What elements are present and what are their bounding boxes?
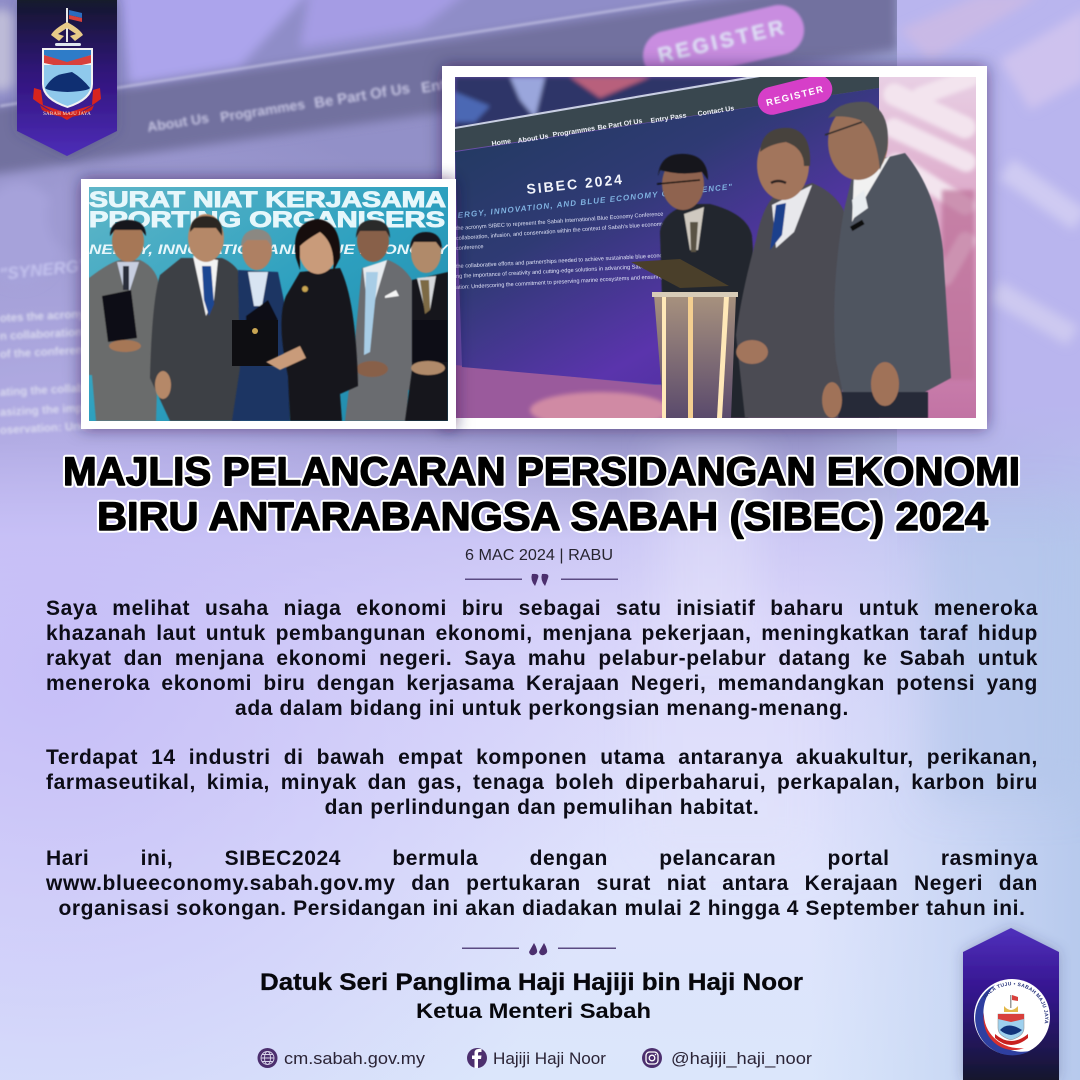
backdrop headings: PPORTING ORGANISERS (89, 207, 445, 232)
closing quote divider (462, 943, 616, 955)
background: blurred stage screen photo with lavender-blue wash: of the conference (0, 344, 96, 361)
title: BIRU ANTARABANGSA SABAH (SIBEC) 2024 (97, 495, 989, 539)
paragraph 1 (46, 597, 1038, 720)
screen (455, 88, 879, 390)
screen navigation labels: Entry Pass (650, 112, 687, 125)
woman in black (266, 219, 358, 421)
motto scroll (33, 88, 101, 120)
background: blurred stage screen photo with lavender-blue wash: "SYNERGY, (0, 255, 94, 284)
register button: REGISTER (765, 84, 826, 109)
paragraph 1: khazanah laut untuk pembangunan ekonomi, menjana pekerjaan, meningkatkan taraf hidup (46, 622, 1038, 645)
website contact (258, 1048, 426, 1068)
flag banner: Hala Tuju emblem, bottom right (956, 923, 1066, 1080)
background: blurred stage screen photo with lavender-blue wash: otes the acronym (0, 308, 95, 325)
date line and opening quote divider: 6 MAC 2024 | RABU (465, 547, 613, 564)
man 1 (657, 154, 758, 418)
title: BIRU ANTARABANGSA SABAH (SIBEC) 2024 (97, 495, 989, 539)
shield (42, 48, 93, 108)
folder held between man 2 and woman (232, 320, 278, 366)
motto scroll: SABAH MAJU JAYA (43, 112, 91, 117)
flag banner: Sabah coat of arms, top left (17, 0, 117, 156)
facebook contact: Hajiji Haji Noor (493, 1050, 607, 1068)
photo frame: signing ceremony: NERGY, INNOVATION AND BLUE ECONOMY (89, 241, 450, 257)
background: blurred stage screen photo with lavender-blue wash: Programmes (219, 96, 306, 125)
lectern (652, 292, 738, 418)
paragraph 2: Terdapat 14 industri di bawah empat komponen utama antaranya akuakultur, perikanan, (46, 746, 1038, 769)
paragraph 3 (46, 847, 1038, 920)
flag banner: Hala Tuju emblem, bottom right: HALA TUJU • SABAH MAJU JAYA (983, 982, 1048, 1024)
screen bottom coral (455, 365, 879, 418)
background: blurred stage screen photo with lavender-blue wash: About Us (146, 109, 210, 135)
man 3 (822, 102, 951, 418)
screen navigation labels: Be Part Of Us (597, 118, 643, 132)
man 2 with tie (150, 214, 246, 421)
photo frame: launch on stage: the collaborative efforts and partnerships needed to achieve sustainable blue economy (456, 253, 670, 270)
man 5 (345, 220, 422, 421)
background: blurred stage screen photo with lavender-blue wash: Be Part Of Us (313, 80, 411, 112)
paragraph 1: meneroka ekonomi biru dengan kerjasama Kerajaan Negeri, memandangkan potensi yang (46, 672, 1038, 695)
paragraph 1: ada dalam bidang ini untuk perkongsian menang-menang. (235, 697, 849, 720)
screen navigation labels: Programmes (552, 125, 596, 139)
photo frame: launch on stage: ation: Underscoring the commitment to preserving marine ecosystems and ensuring (456, 274, 663, 291)
screen heading and copy: SIBEC 2024 (526, 171, 625, 197)
man 1 with folder (89, 220, 160, 421)
man 2 (736, 128, 850, 418)
background: blurred stage screen photo with lavender-blue wash: asizing the impor (0, 402, 95, 419)
photo frame: launch on stage: conference (456, 244, 484, 252)
instagram contact: @hajiji_haji_noor (671, 1050, 813, 1068)
screen navigation labels (491, 105, 735, 148)
background: blurred stage screen photo with lavender-blue wash: ating the collabora (0, 382, 103, 399)
man 3 (232, 229, 290, 421)
tablet (631, 259, 729, 288)
speaker role: Ketua Menteri Sabah (416, 1000, 651, 1023)
photo frame: launch on stage: ng the importance of creativity and cutting-edge solutions in advancing Sabah (456, 264, 648, 280)
blurred upper screen shapes (0, 0, 897, 287)
title: MAJLIS PELANCARAN PERSIDANGAN EKONOMI (63, 450, 1020, 494)
photo frame: signing ceremony (81, 179, 456, 429)
paragraph 2 (46, 746, 1038, 819)
paragraph 3: organisasi sokongan. Persidangan ini akan diadakan mulai 2 hingga 4 September tahun ini. (58, 897, 1026, 920)
background: blurred stage screen photo with lavender-blue wash: oservation: Unde (0, 420, 94, 437)
instagram contact (642, 1048, 813, 1068)
paragraph 1: Saya melihat usaha niaga ekonomi biru sebagai satu inisiatif baharu untuk meneroka (46, 597, 1038, 620)
photo frame: launch on stage: collaboration, infusion, and conservation within the context of Sabah's blue economy (456, 221, 665, 242)
paragraph 1: rakyat dan menjana ekonomi negeri. Saya mahu pelabur-pelabur datang ke Sabah untuk (46, 647, 1038, 670)
register button (755, 72, 835, 118)
background: blurred stage screen photo with lavender-blue wash: n collaboration, in (0, 326, 99, 343)
speaker name: Datuk Seri Panglima Haji Hajiji bin Haji Noor (260, 969, 803, 996)
screen nav band (455, 77, 879, 151)
screen navigation labels: Home (491, 138, 512, 148)
screen navigation labels: Contact Us (697, 105, 735, 118)
screen navigation labels: About Us (517, 133, 549, 145)
photo frame: launch on stage: the acronym SIBEC to represent the Sabah International Blue Economy Conference (456, 211, 664, 232)
backdrop headings (89, 187, 446, 232)
paragraph 3: Hari ini, SIBEC2024 bermula dengan pelancaran portal rasminya (46, 847, 1038, 870)
website contact: cm.sabah.gov.my (284, 1050, 426, 1068)
coral right (879, 77, 976, 418)
backdrop headings: SURAT NIAT KERJASAMA (89, 187, 446, 212)
photo frame: launch on stage (442, 66, 987, 429)
paragraph 3: www.blueeconomy.sabah.gov.my dan pertukaran surat niat antara Kerajaan Negeri dan (46, 872, 1038, 895)
background: blurred stage screen photo with lavender-blue wash: REGISTER (656, 15, 789, 67)
paragraph 2: dan perlindungan dan pemulihan habitat. (325, 796, 759, 819)
paragraph 2: farmaseutikal, kimia, minyak dan gas, tenaga boleh diperbaharui, perkapalan, karbon biru (46, 771, 1038, 794)
coral top left (455, 77, 760, 130)
background: blurred stage screen photo with lavender-blue wash: Entry (420, 74, 461, 97)
crest flag (66, 8, 82, 42)
crest arms (51, 22, 83, 46)
man 6 with folder (405, 232, 448, 421)
title: MAJLIS PELANCARAN PERSIDANGAN EKONOMI (63, 450, 1020, 494)
photo frame: launch on stage: ERGY, INNOVATION, AND BLUE ECONOMY CONFERENCE" (457, 182, 734, 220)
